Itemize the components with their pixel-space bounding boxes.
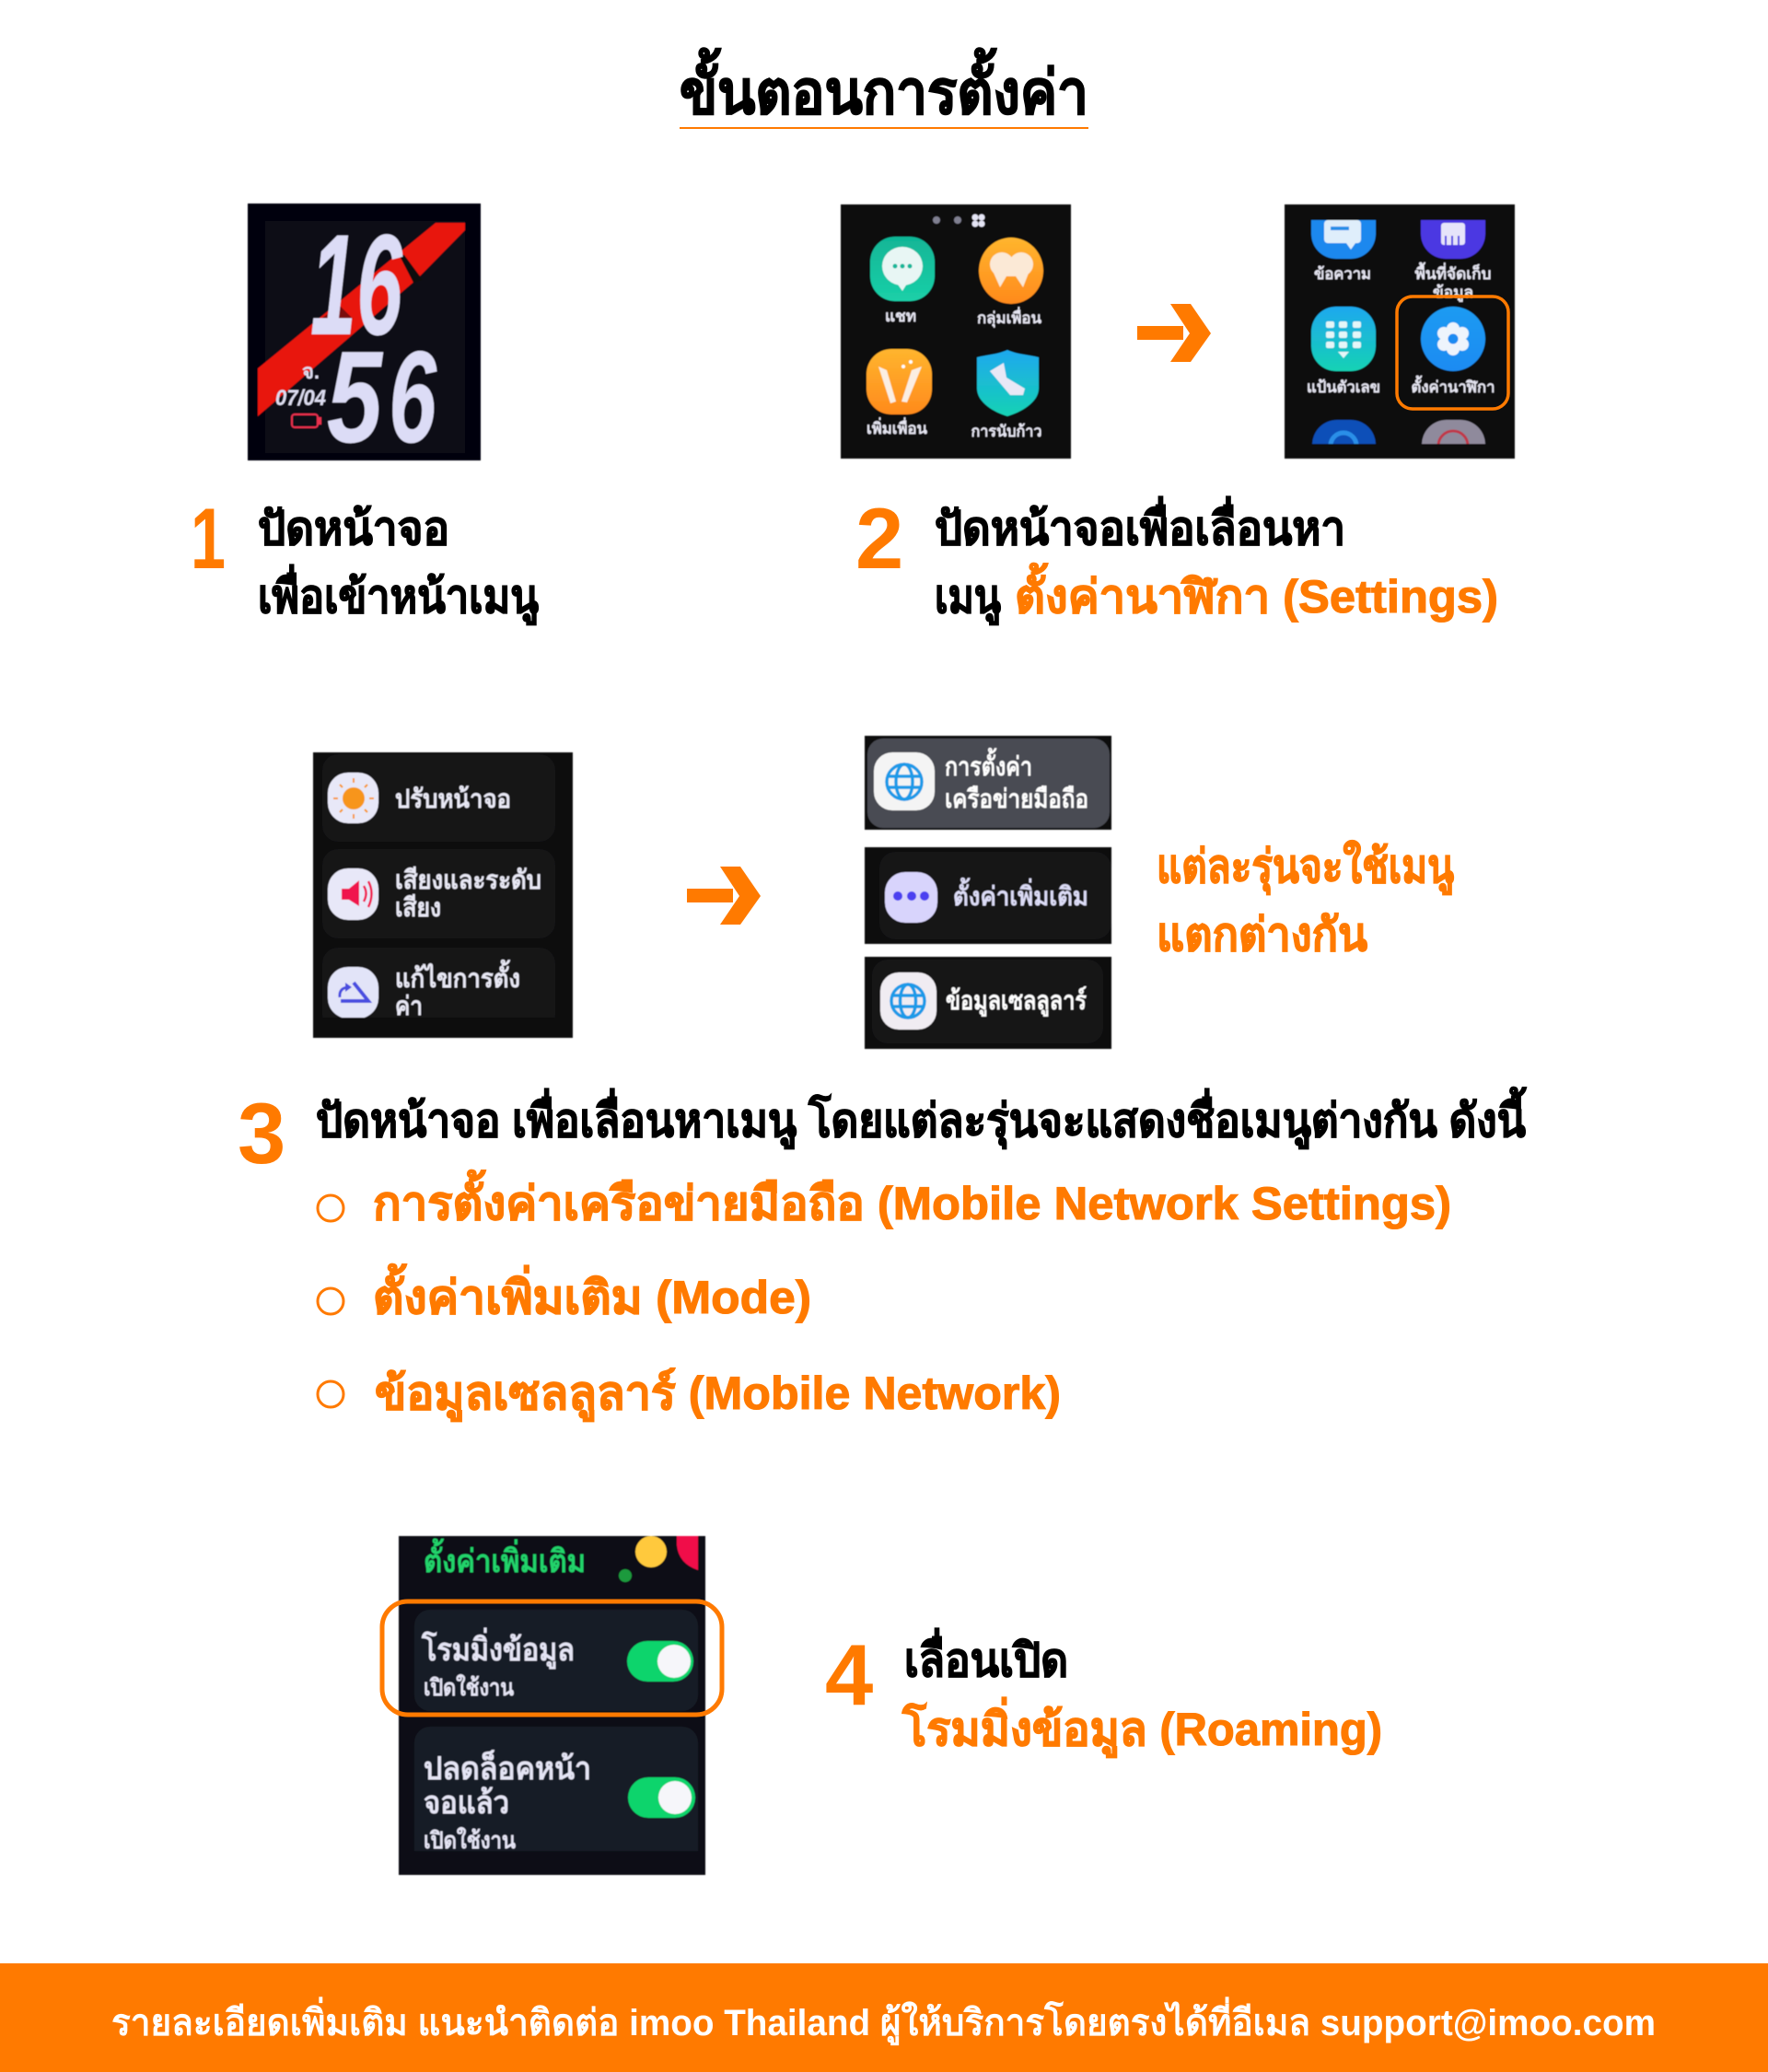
image: watch face (248, 204, 481, 471)
row: unlocked: เปิดใช้งาน (424, 1826, 516, 1854)
icon: step counter (977, 350, 1039, 416)
label: ตั้งค่าเพิ่มเติม (953, 877, 1088, 911)
note: models differ: แต่ละรุ่นจะใช้เมนู (1157, 840, 1454, 895)
step 2 text: ตั้งค่านาฬิกา (Settings) (1015, 563, 1498, 623)
list item: mobile network settings: การตั้งค่าเครือข่ายมือถือ (Mobile Network Settings) (373, 1170, 1451, 1229)
step 4 number: 4 (825, 1626, 873, 1723)
list item: mode: ตั้งค่าเพิ่มเติม (Mode) (373, 1263, 811, 1323)
step 2 text: ปัดหน้าจอเพื่อเลื่อนหา (935, 496, 1345, 554)
label: add friend: เพิ่มเพื่อน (867, 417, 927, 437)
red diagonal stripe (258, 223, 465, 416)
footer bar (0, 1963, 1768, 2072)
arrow (1137, 304, 1211, 362)
row: sound: เสียงและระดับ (395, 866, 541, 894)
menu card: cellular data (865, 957, 1111, 1049)
row: display: ปรับหน้าจอ (395, 785, 511, 813)
icon: storage (1420, 219, 1486, 260)
label: เครือข่ายมือถือ (945, 785, 1088, 813)
step 2 text: เมนู (935, 571, 1001, 625)
step 2 text (935, 496, 1498, 625)
icon: numeric keypad (1311, 307, 1376, 371)
label: storage: พื้นที่จัดเก็บ (1414, 262, 1492, 283)
row: unlocked: จอแล้ว (424, 1786, 509, 1821)
date: 07/04 (275, 386, 326, 411)
label: storage second line: ข้อมูล (1433, 284, 1473, 303)
icon: settings gear (1421, 307, 1485, 371)
icon: next row left (1311, 419, 1377, 445)
icon: globe (887, 764, 922, 799)
highlight box (382, 1601, 722, 1715)
row: data roaming: โรมมิ่งข้อมูล (421, 1627, 575, 1670)
step 1 text (258, 503, 539, 625)
image: settings list (313, 752, 573, 1038)
row: unlocked (414, 1726, 698, 1851)
row: edit settings: แก้ไขการตั้ง (395, 959, 520, 993)
icon: three dots (893, 891, 929, 901)
row: edit settings: ค่า (395, 992, 423, 1020)
row: sound (322, 849, 555, 938)
decorative dots (619, 1536, 698, 1582)
list item: mobile network: ข้อมูลเซลลูลาร์ (Mobile Network) (375, 1368, 1061, 1422)
label: chat: แชท (885, 308, 916, 325)
icon: add friend (867, 349, 932, 414)
weekday: จ. (302, 360, 320, 383)
row: unlocked: ปลดล็อคหน้า (424, 1749, 591, 1787)
icon: friend group (979, 238, 1043, 304)
step 1 text: ปัดหน้าจอ (258, 503, 449, 554)
icon: next row right (1421, 419, 1486, 445)
note: models differ (1157, 840, 1454, 960)
step 3 text: ปัดหน้าจอ เพื่อเลื่อนหาเมนู โดยแต่ละรุ่นจะแสดงชื่อเมนูต่างกัน ดังนี้ (316, 1087, 1527, 1149)
step 4 text: เลื่อนเปิด (904, 1628, 1068, 1686)
footer bar: รายละเอียดเพิ่มเติม แนะนำติดต่อ imoo Thailand ผู้ให้บริการโดยตรงได้ที่อีเมล support@imoo.com (111, 1996, 1656, 2045)
image: watch settings icon page (1285, 194, 1515, 475)
arrow (687, 867, 761, 925)
menu card: mobile network settings (865, 736, 1111, 830)
step 1 number: 1 (191, 490, 226, 587)
highlight box (1397, 297, 1508, 409)
stripe shadow lower (316, 306, 353, 331)
heading: ตั้งค่าเพิ่มเติม (424, 1538, 586, 1579)
icon: globe (891, 984, 925, 1018)
note: models differ: แตกต่างกัน (1157, 909, 1367, 960)
step 4 text (901, 1628, 1382, 1758)
minute digit six: 6 (389, 324, 437, 471)
label: friend group: กลุ่มเพื่อน (977, 307, 1041, 328)
image: watch app menu page (841, 204, 1071, 459)
icon: chat (870, 237, 935, 301)
title: ขั้นตอนการตั้งค่า (680, 47, 1088, 126)
row: data roaming: เปิดใช้งาน (424, 1673, 514, 1701)
label: การตั้งค่า (945, 747, 1032, 781)
stripe shadow (399, 254, 423, 283)
label: messages: ข้อความ (1314, 265, 1371, 283)
step 2 number: 2 (855, 490, 903, 587)
image: data roaming screen (399, 1536, 705, 1875)
step 4 text: โรมมิ่งข้อมูล (Roaming) (901, 1697, 1382, 1758)
icon: battery (292, 414, 320, 427)
icon: messages (1310, 219, 1377, 260)
label: numeric keypad: แป้นตัวเลข (1307, 378, 1380, 396)
row: sound: เสียง (395, 893, 441, 922)
hour digits: 16 (310, 205, 403, 366)
label: ข้อมูลเซลลูลาร์ (946, 986, 1087, 1017)
step 1 text: เพื่อเข้าหน้าเมนู (258, 565, 539, 625)
label: step counter: การนับก้าว (971, 423, 1042, 440)
row: data roaming (414, 1610, 698, 1711)
menu card: mode (865, 847, 1111, 944)
row: edit settings (322, 948, 555, 1019)
label (945, 747, 1088, 813)
row: display (322, 754, 555, 842)
step 3 number: 3 (238, 1085, 285, 1182)
page dots (933, 216, 961, 224)
minute digit five: 5 (327, 324, 384, 471)
label: watch settings: ตั้งค่านาฬิกา (1411, 375, 1495, 396)
